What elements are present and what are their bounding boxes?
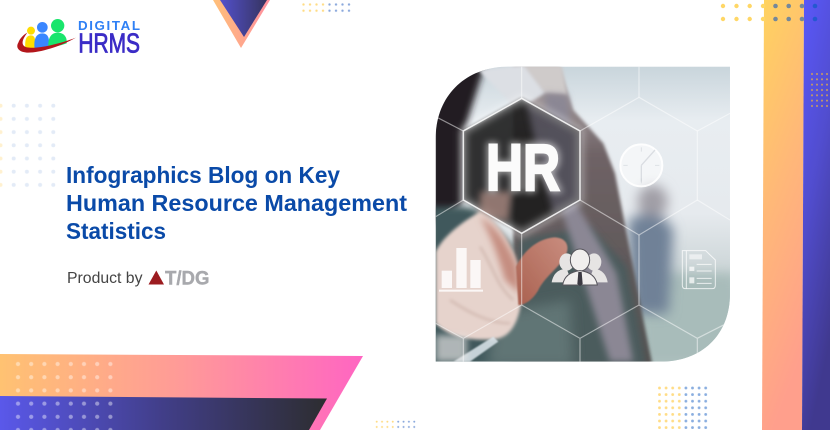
icon: bar chart <box>439 248 483 292</box>
bottom banner: dark blue <box>0 396 327 430</box>
logo icon: three people with swoosh <box>17 19 76 53</box>
title <box>66 162 407 244</box>
blurred background person <box>628 185 673 313</box>
dot grid: top centre <box>300 2 352 14</box>
pointing hand <box>436 192 568 340</box>
dot grid: bottom banner <box>11 357 117 430</box>
dot grid: left <box>0 99 60 192</box>
cuff highlight <box>453 337 498 362</box>
photo: HR hexagon touch interface <box>430 60 737 367</box>
title: Infographics Blog on Key <box>66 162 340 188</box>
decorative vertical band: yellow <box>762 0 804 430</box>
dot grid: top right <box>721 4 817 21</box>
top triangle <box>213 0 270 48</box>
tie <box>545 93 633 362</box>
HR hexagon label: HR <box>485 132 561 206</box>
AT/DG logo: T/DG <box>165 268 210 290</box>
decorative vertical band: blue <box>802 0 830 430</box>
icon: document <box>682 251 715 289</box>
bottom banner: pink and orange <box>0 354 363 430</box>
logo: Digital HRMS <box>17 18 140 58</box>
logo wordmark: HRMS: HRMS <box>78 27 140 58</box>
title: Statistics <box>66 218 166 244</box>
HR hexagon label: HR <box>486 130 560 204</box>
dot grid: bottom middle <box>374 419 417 430</box>
HR hexagon label <box>482 138 566 198</box>
icon: people group <box>552 249 608 286</box>
hexagon dark fill <box>463 98 580 233</box>
icon: clock <box>620 144 662 186</box>
hexagon lattice <box>436 67 730 362</box>
logo wordmark: DIGITAL: DIGITAL <box>78 18 140 33</box>
businessman jacket <box>430 60 653 367</box>
shirt collar <box>478 66 568 104</box>
dot grid: bottom right <box>656 385 709 430</box>
dot grid: on blue band <box>810 72 830 109</box>
photo background <box>430 60 737 367</box>
product by label: Product by <box>67 270 143 287</box>
product by line <box>67 268 210 290</box>
title: Human Resource Management <box>66 190 407 216</box>
